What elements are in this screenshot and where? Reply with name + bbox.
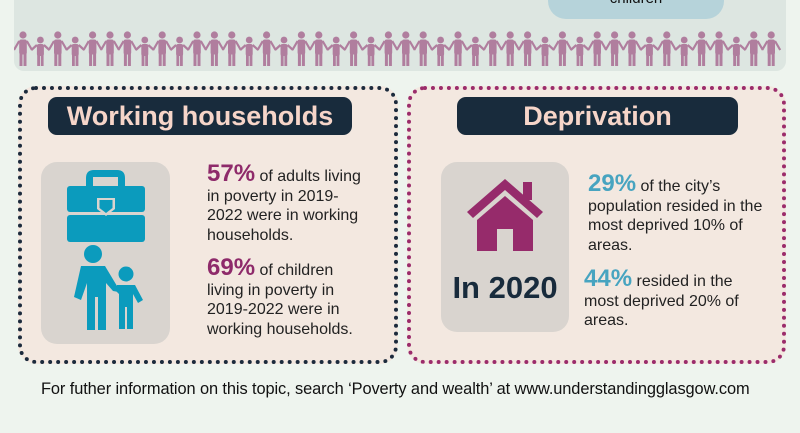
text: 44%: 44% resided in the most deprived 20% of areas. [584, 265, 739, 329]
icon box: briefcase and family [41, 162, 170, 344]
icon box: house and year [441, 162, 569, 332]
year label: In 2020 [452, 270, 558, 305]
house icon [467, 179, 543, 251]
panel: deprivation [407, 86, 786, 364]
heading: working households: Working households [67, 101, 333, 131]
text: 29%: 29% of the city’s population resided in the most deprived 10% of areas. [588, 170, 762, 254]
panel: working households [18, 86, 398, 364]
people row icons [14, 31, 781, 66]
adult and child [74, 245, 143, 330]
briefcase [67, 170, 145, 242]
callout: children [548, 0, 724, 19]
top panel: people [14, 0, 786, 71]
heading: deprivation: Deprivation [523, 101, 672, 131]
heading: deprivation [457, 97, 738, 135]
text: 69% children: 69% of children living in poverty in 2019-2022 were in working households. [207, 254, 353, 338]
heading: working households [48, 97, 352, 135]
footer: For futher information on this topic, search ‘Poverty and wealth’ at www.understandingglasgow.com [41, 380, 750, 398]
text: 57% adults: 57% of adults living in poverty in 2019-2022 were in working households. [207, 160, 361, 244]
